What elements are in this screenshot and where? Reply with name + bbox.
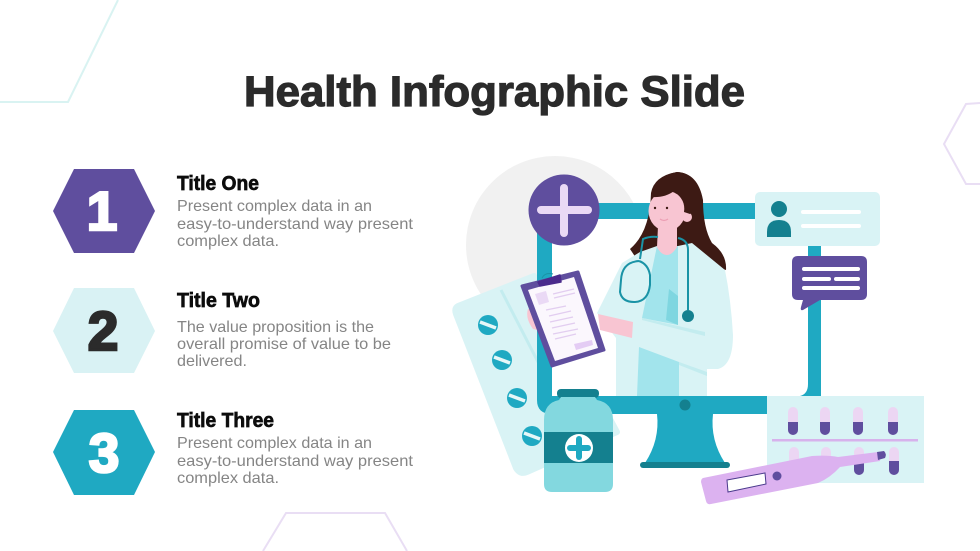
item three text: Title Three bbox=[177, 410, 274, 432]
item two bbox=[53, 288, 391, 373]
neck and face bbox=[657, 226, 677, 255]
item three bbox=[53, 410, 414, 495]
hexagon 1 bbox=[53, 169, 155, 253]
item two text: Title Two bbox=[177, 290, 260, 312]
item three text: easy-to-understand way present bbox=[177, 453, 414, 470]
hexagon 3 bbox=[53, 410, 155, 495]
item three text: Present complex data in an bbox=[177, 435, 372, 452]
item one text bbox=[177, 173, 414, 250]
hexagon 1: 1 bbox=[87, 180, 117, 242]
chat bubble bbox=[792, 256, 867, 310]
blister pack bbox=[455, 276, 617, 473]
hexagon 3: 3 bbox=[89, 422, 119, 484]
hands bbox=[598, 314, 633, 338]
item two text: The value proposition is the bbox=[177, 319, 374, 336]
item three text: complex data. bbox=[177, 470, 279, 487]
item one text: Title One bbox=[177, 173, 259, 195]
illustration: doctor with monitor bbox=[455, 156, 924, 504]
bottle bbox=[544, 389, 613, 492]
item two text: overall promise of value to be bbox=[177, 336, 391, 353]
item two text bbox=[177, 290, 391, 370]
test tube panel bbox=[767, 396, 924, 483]
title: Health Infographic Slide bbox=[244, 68, 745, 116]
scrubs bbox=[642, 246, 678, 325]
item three text bbox=[177, 410, 414, 487]
hair bbox=[630, 172, 726, 270]
item one bbox=[53, 169, 414, 253]
thermometer bbox=[701, 451, 886, 504]
item one text: easy-to-understand way present bbox=[177, 216, 414, 233]
hexagon 2: 2 bbox=[88, 300, 118, 362]
doctor bbox=[527, 172, 733, 396]
hexagon 2 bbox=[53, 288, 155, 373]
item one text: Present complex data in an bbox=[177, 198, 372, 215]
background circle bbox=[466, 156, 644, 334]
lab coat bbox=[597, 243, 733, 396]
item two text: delivered. bbox=[177, 353, 247, 370]
plus badge bbox=[528, 174, 600, 246]
clipboard bbox=[522, 272, 604, 366]
item one text: complex data. bbox=[177, 233, 279, 250]
profile card bbox=[755, 192, 880, 246]
stethoscope bbox=[620, 237, 688, 310]
monitor bbox=[537, 203, 821, 468]
